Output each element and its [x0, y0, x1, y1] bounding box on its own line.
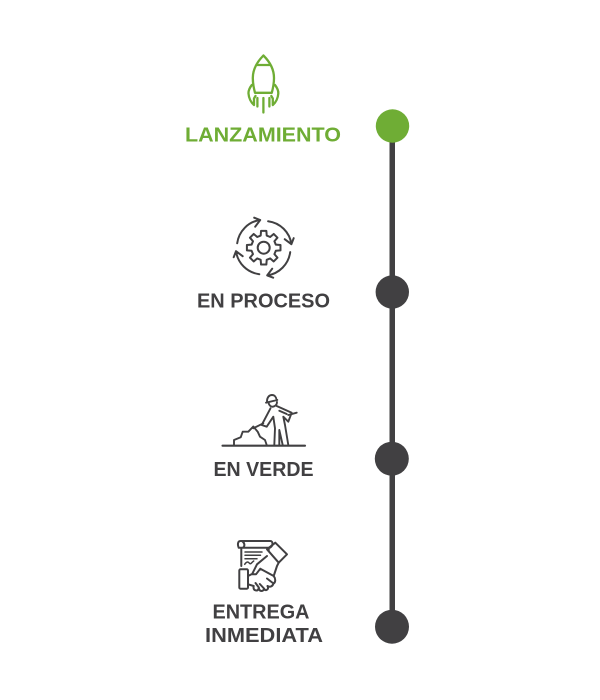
gear [247, 231, 280, 264]
label: entrega: ENTREGA [212, 600, 310, 624]
right cuff [267, 543, 287, 563]
shovel [253, 413, 297, 428]
icon: handshake over contract [238, 541, 287, 591]
arrows [237, 218, 260, 243]
icon: construction worker shoveling [222, 395, 305, 446]
gear hub [258, 242, 270, 254]
label: inmediata: INMEDIATA [205, 624, 323, 647]
milestone dot: en verde [375, 442, 409, 476]
contract lines [245, 552, 262, 564]
shaking hands [248, 556, 279, 591]
timeline vertical line [390, 126, 395, 626]
milestone dot: entrega inmediata [375, 610, 409, 644]
helmet and head [266, 395, 277, 407]
milestone dot: en proceso [376, 275, 409, 309]
label: en verde: EN VERDE [214, 458, 314, 481]
milestone dot: lanzamiento [376, 109, 409, 143]
body and legs [262, 406, 292, 445]
ground [222, 445, 305, 447]
contract paper [238, 541, 272, 566]
icon: rocket [248, 56, 278, 112]
dirt mound [234, 426, 267, 445]
left cuff [239, 569, 248, 589]
label: en proceso: EN PROCESO [197, 290, 330, 312]
icon: gear with circular arrows [234, 218, 294, 278]
label: lanzamiento: LANZAMIENTO [185, 124, 341, 146]
